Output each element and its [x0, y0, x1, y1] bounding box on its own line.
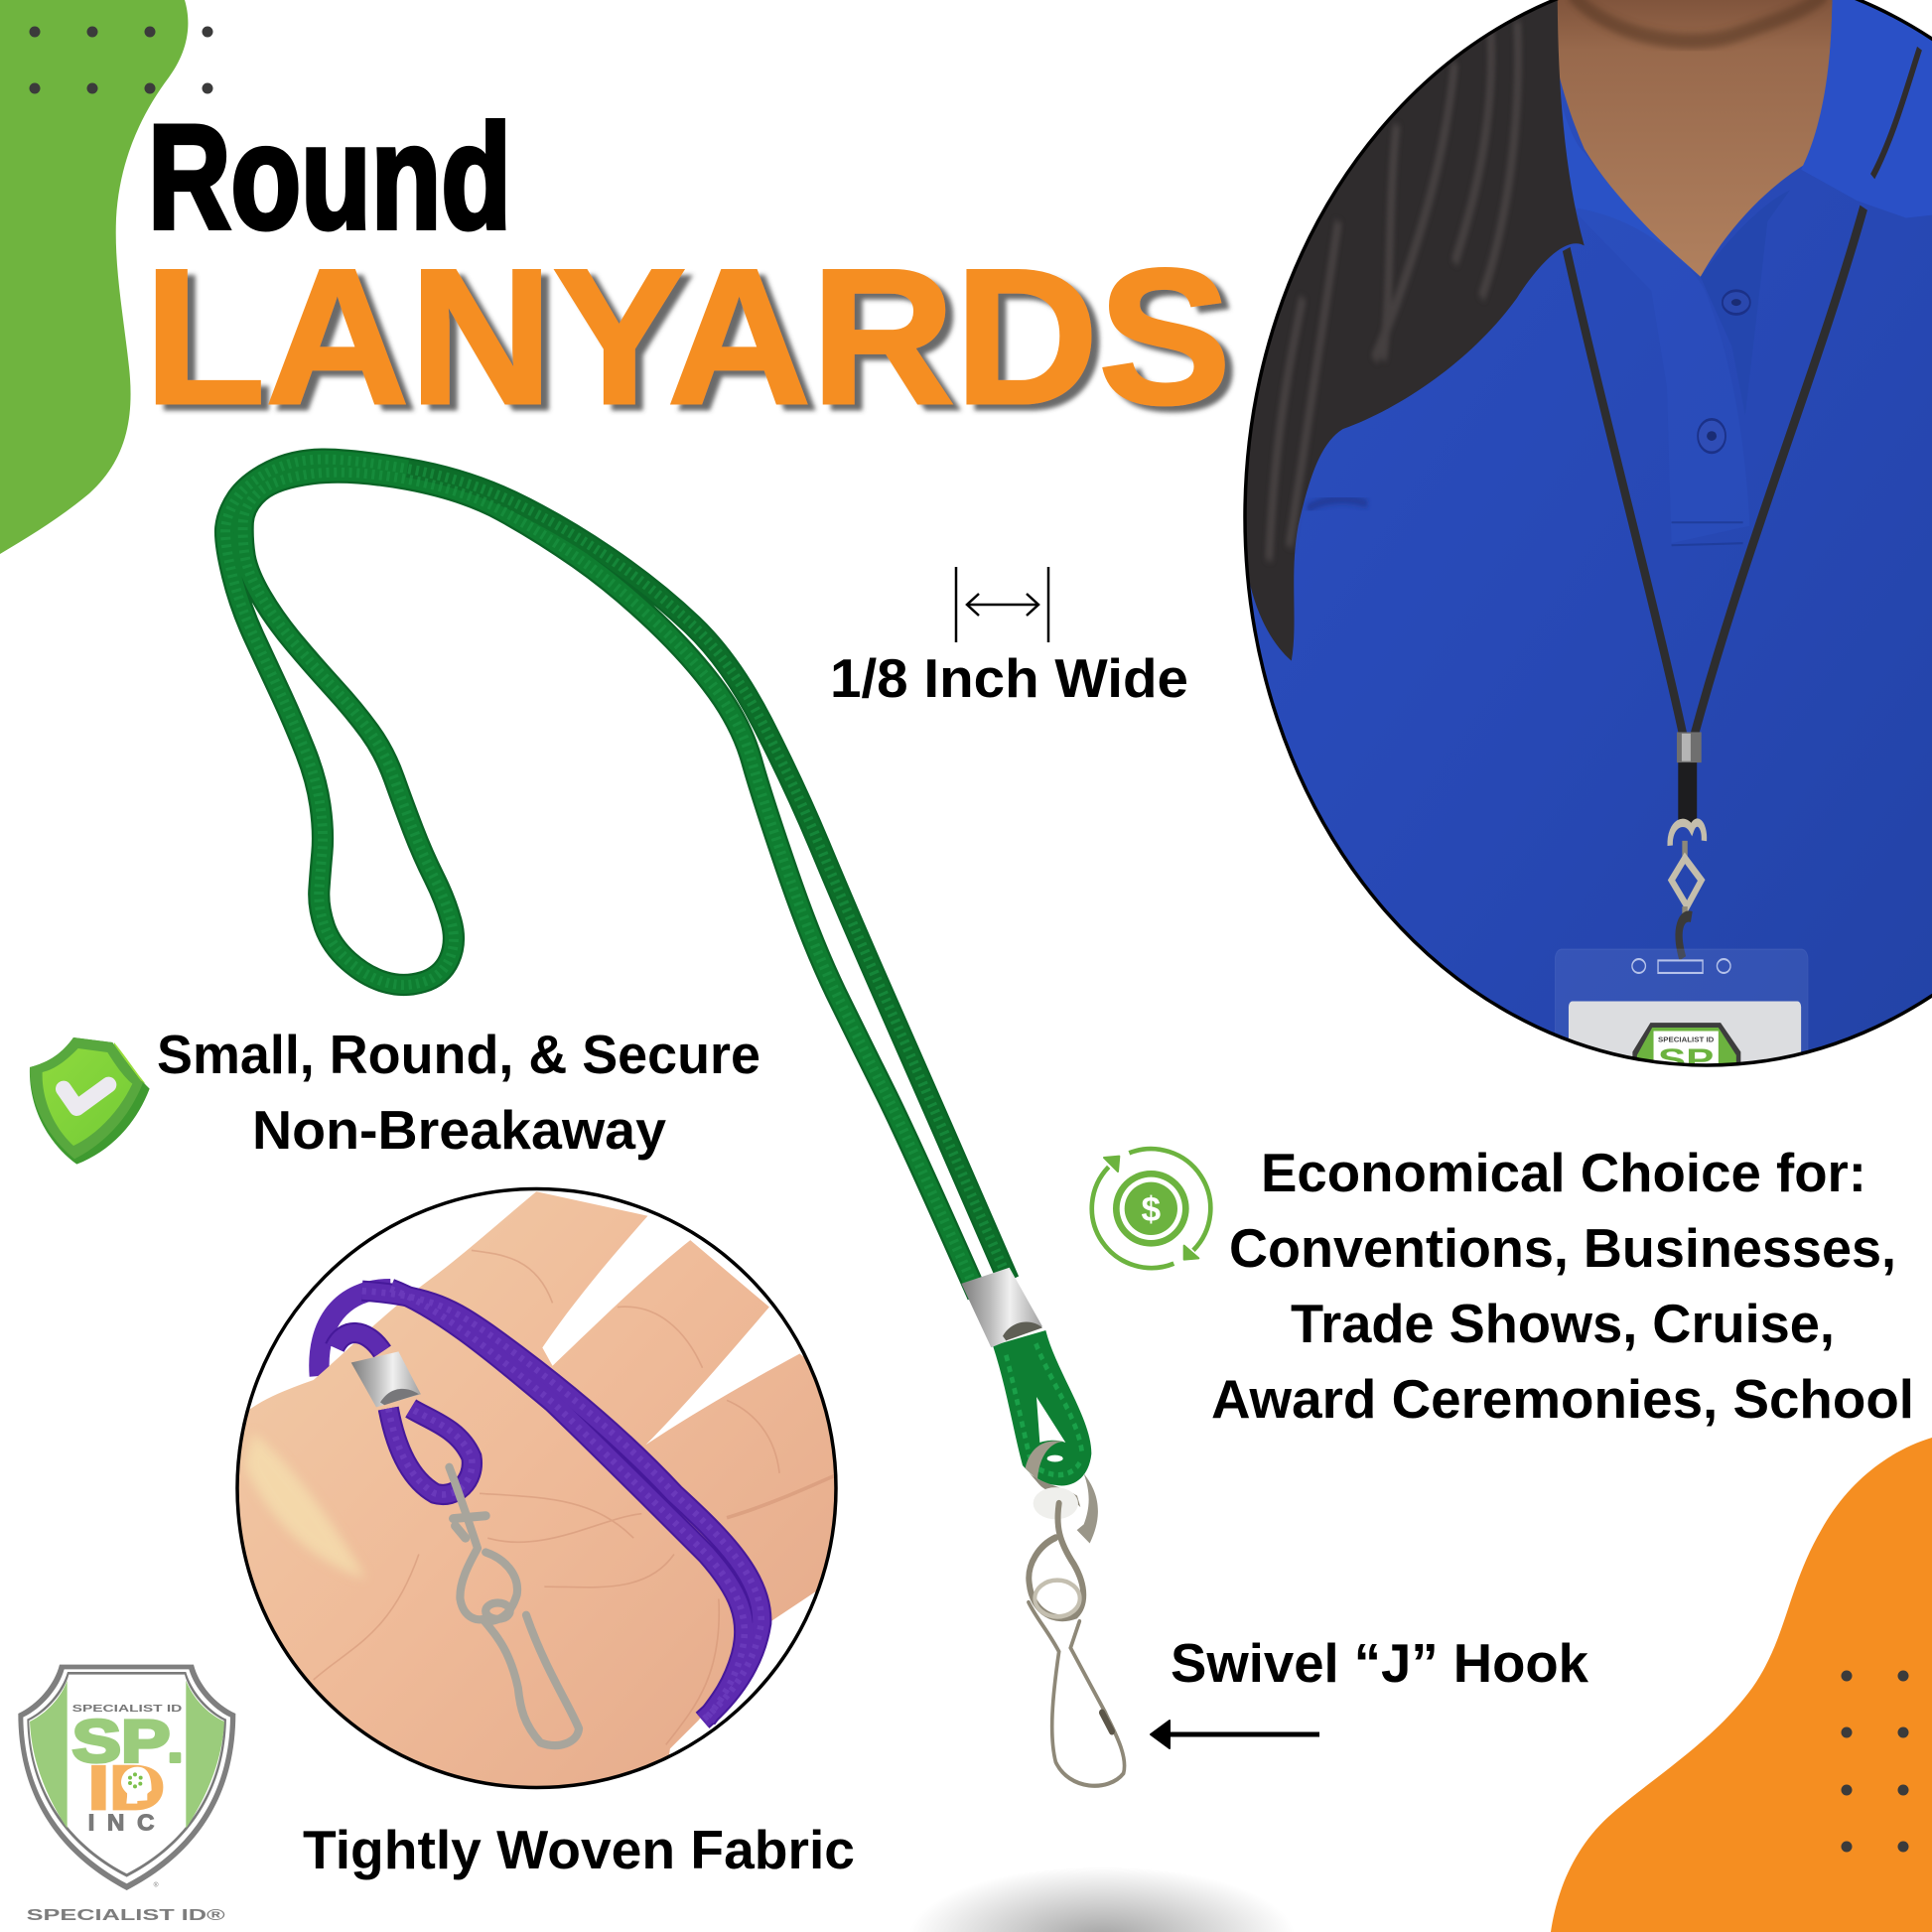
logo wordmark: ID: [88, 1754, 165, 1823]
width dimension icon: [956, 567, 1048, 642]
lanyard cord on shirt: [1567, 207, 1863, 737]
back cord behind hand: [319, 1289, 390, 1376]
right collar: [1801, 0, 1932, 218]
decorative green blob: [0, 0, 188, 554]
shirt crease: [1308, 499, 1367, 508]
photo: person wearing lanyard: [1243, 0, 1932, 1067]
weave dashes: [1006, 1343, 1082, 1475]
ferrule and lower cord: [1677, 732, 1702, 827]
label: economical choice: Economical Choice for:: [1261, 1142, 1866, 1203]
label: economical choice: Trade Shows, Cruise,: [1291, 1293, 1835, 1354]
palm highlight: [244, 1433, 366, 1579]
hair: [1244, 0, 1585, 661]
label: width: 1/8 Inch Wide: [830, 647, 1188, 709]
palm creases: [314, 1250, 840, 1744]
shirt: [1250, 0, 1932, 1052]
label: economical choice: Award Ceremonies, School: [1211, 1368, 1914, 1430]
label: small round secure: [157, 1024, 760, 1161]
card logo: SP: [1658, 1044, 1714, 1076]
ferrule: [351, 1351, 421, 1407]
lower cord loop: [993, 1330, 1091, 1485]
icon: green shield with check: [30, 1037, 150, 1165]
logo wordmark: SPECIALIST ID: [72, 1704, 182, 1715]
purple cord bodies: [335, 1289, 761, 1721]
swivel hook: [1670, 823, 1704, 958]
title: Round: Round: [148, 93, 511, 260]
cord weave: [225, 460, 1009, 1296]
logo wordmark: SP: [72, 1708, 170, 1775]
purple cord edges: [335, 1289, 761, 1721]
card logo: [1632, 1023, 1741, 1064]
dot grid bottom right: [1841, 1670, 1908, 1853]
label: economical choice: [1211, 1142, 1914, 1430]
shield outline: [18, 1665, 235, 1890]
cord body: [225, 460, 1009, 1296]
label: woven fabric: Tightly Woven Fabric: [303, 1819, 855, 1880]
green round lanyard product: [225, 460, 1125, 1786]
decorative orange blob: [1551, 1438, 1932, 1932]
hand silhouette: [236, 1191, 848, 1814]
logo wordmark: ®: [154, 1881, 159, 1889]
shirt placket: [1571, 207, 1749, 543]
label: economical choice: Conventions, Businesses,: [1229, 1217, 1896, 1279]
card logo: SPECIALIST ID: [1658, 1037, 1714, 1044]
neck skin: [1544, 0, 1833, 277]
label: swivel hook: Swivel “J” Hook: [1171, 1632, 1588, 1694]
head icon: [121, 1767, 152, 1804]
label: small round secure: Non-Breakaway: [252, 1099, 666, 1161]
white backing: [228, 1181, 864, 1817]
darker outer strand: [407, 469, 1009, 1281]
logo wordmark: [72, 1704, 182, 1889]
bottom wordmark: SPECIALIST ID®: [27, 1907, 225, 1924]
left collar: [1563, 107, 1700, 276]
label: small round secure: Small, Round, & Secure: [157, 1024, 760, 1085]
green side panels: [30, 1681, 68, 1829]
title: LANYARDS: LANYARDS: [144, 229, 1231, 445]
floor shadow: [908, 1866, 1296, 1932]
logo wordmark: INC: [88, 1809, 167, 1835]
photo: purple lanyard on hand: [235, 1187, 838, 1789]
cord weave: [362, 1289, 761, 1721]
chin shadow: [1571, 0, 1826, 42]
dot grid top left: [30, 26, 212, 93]
badge holder: [1555, 949, 1809, 1062]
ferrule: [961, 1268, 1042, 1347]
arrow pointing to hook: [1151, 1721, 1319, 1748]
hair highlights: [1269, 21, 1518, 561]
logo: Specialist ID shield: [18, 1665, 235, 1924]
gap in loop: [1036, 1397, 1065, 1443]
metal hook: [449, 1467, 579, 1745]
ferrule, lower loop and J hook: [961, 1268, 1125, 1786]
hook wire: [1029, 1503, 1125, 1786]
buttons and inner placket: [1672, 191, 1790, 545]
icon: money cycle: $: [1142, 1190, 1162, 1229]
swivel cap: [1026, 1441, 1065, 1480]
cord edge: [225, 460, 1009, 1296]
icon: money cycle: [1092, 1149, 1210, 1268]
right side hair strand: [1872, 49, 1919, 177]
